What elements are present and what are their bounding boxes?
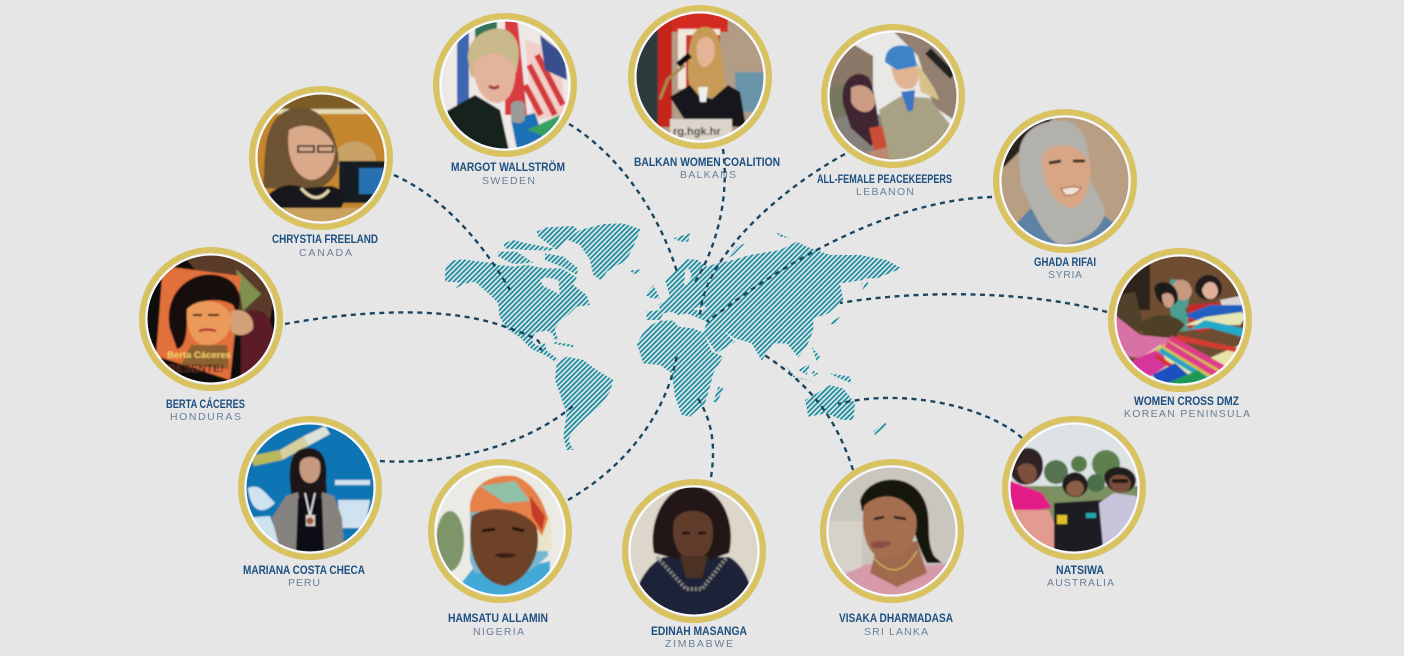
label: Balkan Women Coalition: BALKAN WOMEN COALITION: [634, 157, 780, 169]
label: Visaka Dharmadasa: SRI LANKA: [864, 626, 928, 638]
label: Chrystia Freeland: CANADA: [299, 247, 352, 259]
card: Edinah Masanga: [624, 481, 764, 650]
label: Berta Cáceres: BERTA CÁCERES: [166, 398, 245, 411]
portrait: Ghada Rifai: [995, 111, 1135, 251]
label: Hamsatu Allamin: NIGERIA: [473, 626, 524, 638]
card: Balkan Women Coalition: [630, 7, 780, 181]
label: Margot Wallström: [451, 161, 565, 187]
card: Ghada Rifai: [995, 111, 1135, 281]
card: All-Female Peacekeepers: [817, 26, 963, 198]
label: Hamsatu Allamin: [448, 613, 548, 638]
portrait: Mariana Costa Checa: [240, 418, 380, 558]
label: Margot Wallström: SWEDEN: [482, 175, 535, 187]
label: Natsiwa: NATSIWA: [1056, 565, 1104, 577]
North America: [445, 259, 590, 362]
label: Hamsatu Allamin: HAMSATU ALLAMIN: [448, 613, 548, 625]
portrait: Berta Cáceres: PRESENTE!: [161, 363, 224, 375]
label: Women Cross DMZ: KOREAN PENINSULA: [1124, 408, 1250, 420]
Australia: [805, 385, 855, 420]
label: Balkan Women Coalition: BALKANS: [680, 169, 736, 181]
label: Chrystia Freeland: CHRYSTIA FREELAND: [272, 234, 378, 246]
South America: [555, 357, 613, 450]
card: Margot Wallström: [435, 15, 575, 187]
card: Chrystia Freeland: [251, 88, 391, 259]
label: Ghada Rifai: SYRIA: [1048, 269, 1082, 281]
Hudson Bay: [540, 277, 560, 295]
portrait: Hamsatu Allamin: [430, 461, 570, 601]
Madagascar: [713, 387, 723, 403]
label: Margot Wallström: MARGOT WALLSTRÖM: [451, 161, 565, 174]
label: Natsiwa: [1047, 565, 1114, 589]
Africa: [637, 321, 723, 417]
Iceland: [630, 269, 640, 274]
portrait: Visaka Dharmadasa: [822, 461, 962, 601]
world map: [445, 223, 902, 450]
New Zealand: [873, 422, 887, 435]
portrait: Edinah Masanga: [624, 481, 764, 621]
label: Mariana Costa Checa: MARIANA COSTA CHECA: [243, 565, 365, 577]
label: Visaka Dharmadasa: [839, 613, 953, 638]
label: Balkan Women Coalition: [634, 157, 780, 181]
label: Visaka Dharmadasa: VISAKA DHARMADASA: [839, 613, 953, 625]
label: Women Cross DMZ: WOMEN CROSS DMZ: [1134, 396, 1239, 408]
label: Mariana Costa Checa: PERU: [288, 577, 320, 589]
connector lines: [285, 124, 1107, 500]
card: Natsiwa: [1002, 418, 1144, 589]
card: Women Cross DMZ: [1110, 250, 1250, 420]
label: Berta Cáceres: HONDURAS: [170, 411, 241, 423]
label: Berta Cáceres: [166, 398, 245, 423]
portrait: Berta Cáceres: Berta Cáceres: [167, 350, 231, 361]
Baltic and Black Sea: [684, 268, 707, 312]
label: Edinah Masanga: ZIMBABWE: [665, 638, 733, 650]
label: Ghada Rifai: [1034, 257, 1096, 281]
portrait: Margot Wallström: [435, 15, 575, 155]
portrait: Balkan Women Coalition: rg.hgk.hr: [673, 126, 721, 138]
label: Mariana Costa Checa: [243, 565, 365, 589]
label: Ghada Rifai: GHADA RIFAI: [1034, 257, 1096, 269]
label: Chrystia Freeland: [272, 234, 378, 259]
label: Edinah Masanga: [651, 626, 747, 650]
label: All-Female Peacekeepers: ALL-FEMALE PEACEKEEPERS: [817, 174, 952, 186]
portrait: Balkan Women Coalition: [630, 7, 770, 147]
card: Hamsatu Allamin: [430, 461, 570, 638]
Asia Pacific islands: [787, 280, 868, 383]
label: Women Cross DMZ: [1124, 396, 1250, 420]
label: All-Female Peacekeepers: [817, 174, 952, 198]
label: Natsiwa: AUSTRALIA: [1047, 577, 1114, 589]
British Isles: [645, 285, 660, 298]
Caribbean: [552, 330, 573, 347]
Arctic islands: [498, 226, 578, 275]
label: All-Female Peacekeepers: LEBANON: [856, 186, 914, 198]
portrait: Berta Cáceres: [141, 249, 281, 389]
label: Edinah Masanga: EDINAH MASANGA: [651, 626, 747, 638]
card: Berta Cáceres: [141, 249, 281, 423]
Eurasia: [647, 242, 902, 361]
portrait: All-Female Peacekeepers: [823, 26, 963, 166]
portrait: Women Cross DMZ: [1110, 250, 1250, 395]
portrait: Chrystia Freeland: [251, 88, 391, 233]
card: Visaka Dharmadasa: [822, 461, 962, 638]
card: Mariana Costa Checa: [240, 418, 380, 589]
portrait: Natsiwa: [1002, 418, 1144, 561]
Northern islands: [673, 232, 790, 260]
Greenland: [567, 223, 641, 281]
